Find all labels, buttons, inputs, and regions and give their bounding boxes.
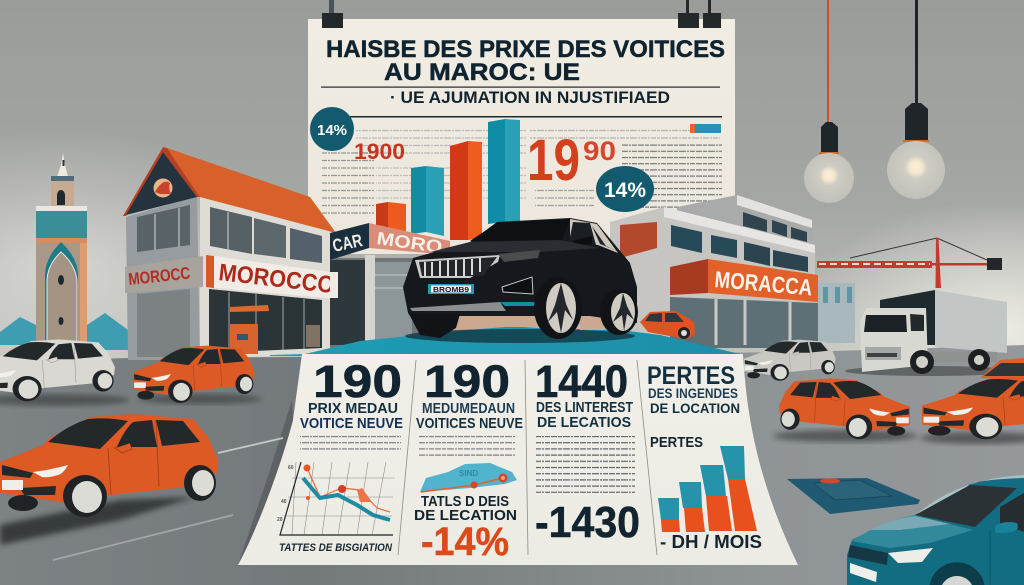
licence plate: BROMB9 (433, 287, 469, 294)
icon: crane (817, 238, 1002, 288)
stat column 4: PERTES (650, 434, 703, 451)
stat column 4 (647, 362, 762, 552)
line chart: 60 (288, 465, 294, 471)
upper windows (137, 205, 322, 263)
sign: CAR MOROC: MORO (375, 228, 444, 257)
icon: teal car sketch: SIND (459, 469, 478, 478)
stat column 3: DES LINTEREST (536, 399, 633, 416)
SUV tyres and wheels (409, 277, 638, 339)
sign: MORACCA: MORACCA (714, 266, 813, 301)
stat column 2: MEDUMEDAUN (422, 400, 515, 417)
SUV platform (270, 326, 745, 356)
badge 14% left (310, 107, 354, 151)
road (0, 345, 1024, 585)
stat column 2: DE LECATION (414, 507, 517, 524)
small red car behind SUV (640, 311, 695, 339)
orange car large left (0, 414, 218, 545)
badge 14% left: 14% (317, 122, 347, 139)
stat column 1: VOITICE NEUVE (300, 415, 403, 432)
sign: CAR MOROC (330, 223, 450, 260)
licence plate (428, 284, 474, 294)
stat column 4: - DH / MOIS (660, 532, 762, 552)
orange car top left (133, 346, 262, 404)
white car left (0, 339, 130, 406)
icon: pendant lamp red (804, 0, 854, 203)
line chart: 20 (277, 517, 283, 523)
sign: MOROCCO: MOROCCO (217, 259, 336, 299)
stat column 4: DES INGENDES (648, 385, 738, 401)
icon: teal car sketch (420, 463, 517, 492)
sign: CAR MOROC: CAR (331, 230, 364, 256)
road markings (53, 438, 283, 560)
teal car bottom right (847, 475, 1024, 585)
line chart (277, 462, 395, 535)
panel edge shadow on road (238, 400, 300, 565)
SUV (403, 218, 638, 343)
stat column 1 (277, 356, 403, 554)
gray car far right (744, 340, 836, 381)
icon: pendant lamp black (887, 0, 945, 199)
poster title: HAISBE DES PRIXE DES VOITICES (326, 36, 725, 63)
far background tower (818, 283, 855, 343)
teal hills (0, 313, 128, 350)
badge 14% right (596, 166, 654, 212)
stat column 2: VOITICES NEUVE (416, 415, 523, 432)
stat column 2: TATLS D DEIS (421, 493, 509, 510)
stat column 4: PERTES (647, 362, 735, 390)
sign: MOROCC: MOROCC (127, 264, 191, 289)
panel: right dealership building (610, 195, 818, 348)
stat column 2 (414, 356, 523, 564)
poster hanging clips (322, 0, 721, 28)
panel: centre dealership building (330, 223, 450, 350)
line chart: 40 (281, 499, 287, 505)
stat column 3 (535, 356, 640, 547)
panel: left dealership building (123, 147, 338, 360)
poster subtitle: · UE AJUMATION IN NJUSTIFIAED (390, 88, 670, 107)
roof (123, 147, 336, 233)
stat column 1: TATTES DE BISGIATION (279, 542, 393, 554)
stat column 2: 190 (424, 356, 510, 407)
poster title (326, 36, 725, 86)
figure 1900: 1900 (354, 139, 405, 164)
sign: MOROCC (125, 256, 203, 293)
badge 14% right: 14% (604, 179, 646, 202)
orange car right rear view (773, 378, 917, 442)
stat column 1: PRIX MEDAU (308, 400, 398, 417)
stat column 3: 1440 (535, 356, 628, 407)
lower floor glass (137, 289, 322, 357)
sign: MORACCA (670, 259, 818, 302)
panel: bottom statistics sheet (238, 354, 798, 565)
stat column 3: -1430 (535, 498, 640, 547)
stat column 3: DE LECATIOS (537, 414, 631, 431)
bar chart on poster (376, 119, 520, 240)
poster title: AU MAROC: UE (384, 59, 580, 86)
stat column 1: 190 (313, 356, 402, 407)
orange car right front view (920, 376, 1024, 444)
truck (845, 290, 1015, 376)
icon: minaret (36, 153, 87, 350)
partial orange car far right (980, 358, 1024, 378)
icon: dropped document tablet (787, 478, 920, 514)
poster body copy lines (322, 124, 722, 215)
figure 1990: 90 (583, 136, 616, 166)
background glimpse under SUV (455, 314, 605, 331)
panel: poster (308, 19, 735, 254)
figure 1990: 19 (527, 128, 580, 193)
stat column 4: DE LOCATION (650, 400, 740, 416)
stacked bar chart (658, 446, 757, 532)
stat column 2: -14% (421, 520, 509, 564)
